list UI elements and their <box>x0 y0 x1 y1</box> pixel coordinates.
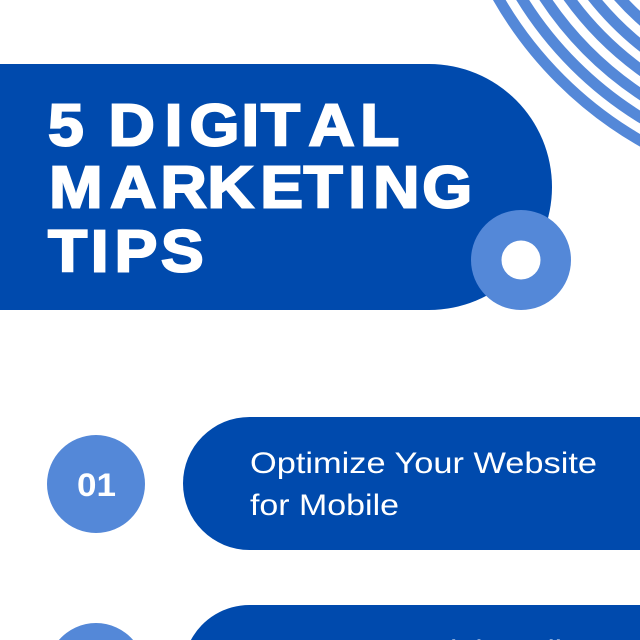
decorative concentric arcs <box>496 0 640 144</box>
tip 1 number badge: 01 <box>77 467 116 503</box>
title: TIPS <box>48 219 204 285</box>
title: MARKETING <box>49 155 472 221</box>
tip 1 <box>47 417 640 550</box>
tip 2 <box>59 605 640 640</box>
icon: ring accent <box>471 210 571 310</box>
tip 1 number badge <box>47 435 145 533</box>
panel: title banner <box>0 64 552 310</box>
tip 2 number badge <box>59 623 133 640</box>
tip 1 panel <box>183 417 640 550</box>
tip 1 text: for Mobile <box>250 489 399 522</box>
tip 1 text <box>250 447 597 522</box>
tip 1 text: Optimize Your Website <box>250 447 597 480</box>
tip 2 panel <box>191 605 640 640</box>
title: 5 DIGITAL <box>48 93 399 159</box>
title <box>48 93 472 285</box>
